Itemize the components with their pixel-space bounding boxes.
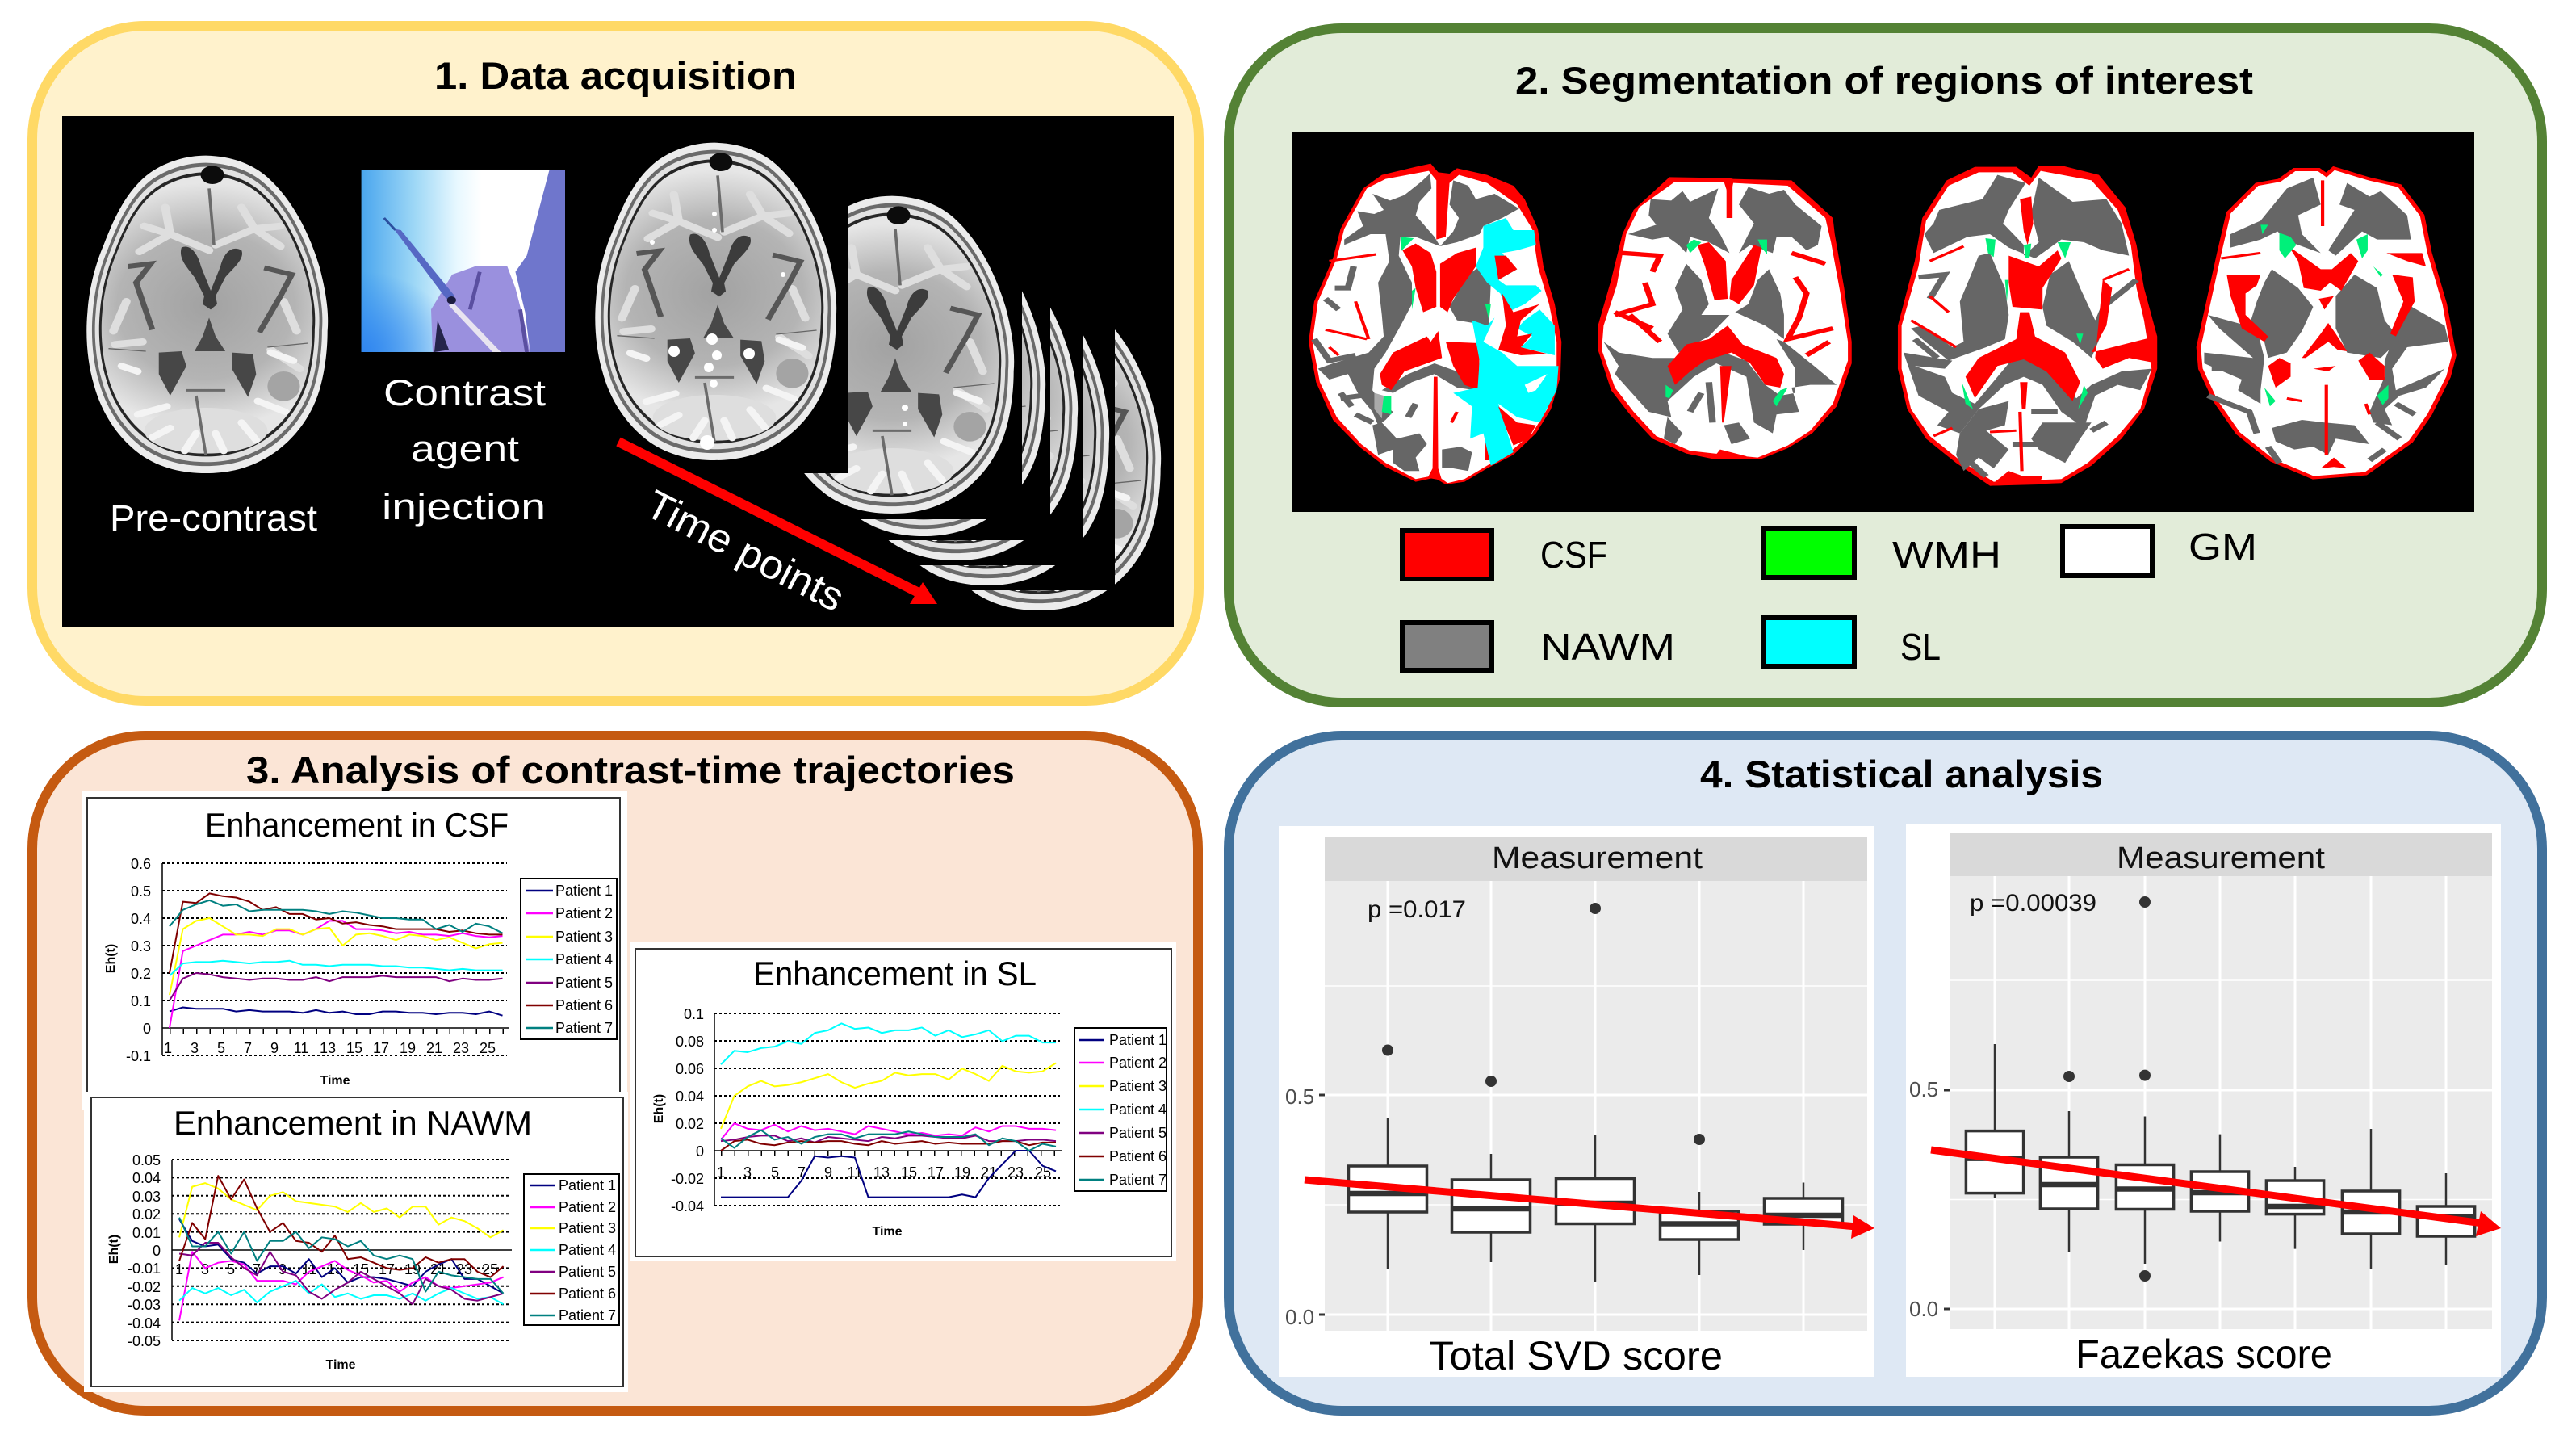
segmentation brain 2	[1598, 177, 1852, 459]
boxplot: total SVD score: Total SVD score	[1429, 1333, 1723, 1378]
chart: enhancement in NAWM: -0.05	[128, 1333, 161, 1349]
chart: enhancement in CSF: 23	[453, 1040, 469, 1056]
chart: enhancement in NAWM: 11	[302, 1261, 316, 1277]
chart: enhancement in CSF: -0.1	[126, 1048, 151, 1064]
boxplot: Fazekas score: Measurement	[2117, 841, 2325, 875]
chart: enhancement in CSF: 21	[426, 1040, 442, 1056]
chart: enhancement in SL: Patient 5	[1109, 1125, 1167, 1141]
chart: enhancement in SL: 9	[824, 1164, 832, 1181]
boxplot: Fazekas score: 0.5	[1909, 1077, 1938, 1101]
chart: enhancement in CSF: 0.2	[131, 966, 151, 982]
chart: enhancement in CSF: Enhancement in CSF	[205, 806, 509, 844]
chart: enhancement in SL: 5	[771, 1164, 779, 1181]
boxplot: total SVD score: 0.0	[1285, 1305, 1314, 1329]
chart: enhancement in CSF: Patient 4	[555, 951, 613, 967]
chart: enhancement in SL: Time	[872, 1225, 903, 1239]
segmentation brain 3	[1898, 166, 2157, 486]
chart: enhancement in CSF: Time	[320, 1074, 350, 1088]
chart: enhancement in NAWM: 5	[227, 1261, 235, 1277]
panel: segmentation of regions of interest	[1229, 28, 2542, 703]
chart: enhancement in NAWM: 15	[353, 1261, 369, 1277]
chart: enhancement in CSF: 25	[480, 1040, 496, 1056]
chart: enhancement in NAWM: -0.03	[128, 1297, 161, 1313]
chart: enhancement in CSF: 19	[400, 1040, 416, 1056]
chart: enhancement in NAWM: 25	[482, 1261, 498, 1277]
chart: enhancement in SL: 11	[848, 1164, 862, 1181]
chart: enhancement in SL: -0.02	[671, 1171, 704, 1187]
chart: enhancement in CSF: 9	[270, 1040, 279, 1056]
chart: enhancement in CSF: Patient 5	[555, 975, 613, 991]
chart: enhancement in CSF	[82, 791, 627, 1121]
image stack: time point MRI frames	[565, 121, 1161, 610]
chart: enhancement in CSF: Patient 1	[555, 883, 613, 899]
chart: enhancement in CSF: Patient 3	[555, 929, 613, 945]
chart: enhancement in CSF: 0.5	[131, 883, 151, 900]
boxplot: total SVD score: Measurement	[1492, 841, 1703, 875]
chart: enhancement in NAWM: 13	[327, 1261, 343, 1277]
panel: analysis of contrast-time trajectories	[32, 736, 1198, 1411]
legend: NAWM: NAWM	[1540, 626, 1675, 668]
chart: enhancement in SL: 21	[981, 1164, 997, 1181]
chart: enhancement in CSF: Patient 6	[555, 997, 613, 1013]
chart: enhancement in SL: Enhancement in SL	[753, 954, 1037, 992]
chart: enhancement in NAWM: Patient 5	[559, 1264, 616, 1280]
segmentation brain 1	[1309, 164, 1561, 484]
chart: enhancement in SL: 0.06	[676, 1061, 704, 1077]
chart: enhancement in NAWM: 0.03	[132, 1189, 161, 1205]
chart: enhancement in CSF: 0.6	[131, 856, 151, 872]
chart: enhancement in NAWM: 19	[404, 1261, 421, 1277]
chart: enhancement in NAWM: Patient 2	[559, 1199, 616, 1215]
chart: enhancement in CSF: 0.1	[131, 993, 151, 1009]
chart: enhancement in NAWM: Patient 3	[559, 1220, 616, 1236]
black segmentation backdrop	[1292, 132, 2474, 512]
black image backdrop	[62, 116, 1174, 627]
chart: enhancement in SL: 1	[717, 1164, 725, 1181]
title: data acquisition: 1. Data acquisition	[434, 54, 797, 97]
chart: enhancement in CSF: 7	[244, 1040, 252, 1056]
chart: enhancement in NAWM: -0.01	[128, 1261, 161, 1277]
chart: enhancement in SL: Patient 3	[1109, 1078, 1167, 1094]
chart: enhancement in NAWM: 1	[175, 1261, 183, 1277]
chart: enhancement in SL: 0.1	[684, 1006, 704, 1022]
chart: enhancement in SL: Patient 6	[1109, 1148, 1167, 1164]
chart: enhancement in NAWM: 0.01	[132, 1225, 161, 1241]
chart: enhancement in SL: -0.04	[671, 1198, 704, 1214]
label: time points: Time points	[639, 481, 852, 620]
arrow: time	[618, 442, 937, 604]
label: contrast agent injection	[382, 372, 547, 527]
boxplot: Fazekas score	[1906, 824, 2501, 1377]
chart: enhancement in SL	[630, 942, 1176, 1261]
legend: WMH	[1764, 528, 2001, 577]
title: statistical analysis: 4. Statistical analysis	[1700, 753, 2103, 795]
chart: enhancement in CSF: Patient 7	[555, 1020, 613, 1036]
chart: enhancement in CSF: 1	[164, 1040, 172, 1056]
chart: enhancement in CSF: Patient 2	[555, 905, 613, 921]
legend: NAWM	[1402, 623, 1675, 670]
chart: enhancement in NAWM: 0.05	[132, 1152, 161, 1168]
boxplot: Fazekas score: p =0.00039	[1970, 890, 2096, 917]
chart: enhancement in CSF: 0	[143, 1021, 151, 1037]
boxplot: Fazekas score: 0.0	[1909, 1297, 1938, 1321]
chart: enhancement in SL: 3	[743, 1164, 752, 1181]
arrow: downward trend	[1305, 1180, 1874, 1239]
chart: enhancement in SL: 0.02	[676, 1116, 704, 1132]
chart: enhancement in SL: Eh(t)	[652, 1094, 666, 1123]
label: contrast agent injection: Contrast	[383, 372, 547, 413]
chart: enhancement in NAWM: 9	[279, 1261, 287, 1277]
legend: CSF: CSF	[1540, 534, 1607, 576]
chart: enhancement in SL: 7	[798, 1164, 806, 1181]
boxplot: total SVD score	[1279, 826, 1874, 1378]
legend: WMH: WMH	[1892, 534, 2001, 576]
title: analysis: 3. Analysis of contrast-time trajectories	[246, 749, 1015, 791]
chart: enhancement in SL: 13	[873, 1164, 890, 1181]
chart: enhancement in CSF: 5	[217, 1040, 225, 1056]
label: pre-contrast: Pre-contrast	[110, 497, 318, 539]
chart: enhancement in SL: 15	[901, 1164, 917, 1181]
chart: enhancement in CSF: 13	[320, 1040, 336, 1056]
chart: enhancement in NAWM: 3	[201, 1261, 209, 1277]
chart: enhancement in SL: Patient 2	[1109, 1055, 1167, 1071]
chart: enhancement in NAWM: 0.04	[132, 1170, 161, 1186]
panel: statistical analysis	[1229, 736, 2542, 1411]
chart: enhancement in SL: Patient 7	[1109, 1172, 1167, 1188]
chart: enhancement in NAWM: 23	[456, 1261, 472, 1277]
chart: enhancement in SL: Patient 1	[1109, 1032, 1167, 1048]
boxplot: total SVD score: 0.5	[1285, 1084, 1314, 1109]
chart: enhancement in SL: 19	[954, 1164, 970, 1181]
chart: enhancement in NAWM: -0.04	[128, 1315, 161, 1332]
chart: enhancement in CSF: 0.3	[131, 938, 151, 954]
image: contrast injection photo	[362, 170, 568, 352]
chart: enhancement in NAWM: Eh(t)	[107, 1235, 121, 1264]
chart: enhancement in NAWM: 21	[430, 1261, 446, 1277]
chart: enhancement in SL: 25	[1035, 1164, 1051, 1181]
panel: data acquisition	[32, 26, 1199, 701]
chart: enhancement in NAWM: Enhancement in NAWM	[174, 1104, 532, 1142]
legend: GM	[2063, 526, 2257, 576]
title: segmentation: 2. Segmentation of regions of interest	[1515, 59, 2253, 102]
chart: enhancement in CSF: 0.4	[131, 911, 151, 927]
chart: enhancement in NAWM: Patient 1	[559, 1177, 616, 1193]
chart: enhancement in NAWM: -0.02	[128, 1279, 161, 1295]
chart: enhancement in NAWM: 0.02	[132, 1206, 161, 1223]
chart: enhancement in CSF: Eh(t)	[104, 944, 118, 973]
legend: GM: GM	[2189, 526, 2257, 568]
chart: enhancement in CSF: 17	[373, 1040, 389, 1056]
chart: enhancement in NAWM: Patient 6	[559, 1286, 616, 1302]
label: contrast agent injection: injection	[382, 486, 546, 527]
chart: enhancement in SL: 0.04	[676, 1089, 704, 1105]
chart: enhancement in CSF: 11	[294, 1040, 308, 1056]
legend: SL: SL	[1900, 626, 1941, 668]
label: contrast agent injection: agent	[411, 428, 520, 469]
chart: enhancement in NAWM: Time	[325, 1358, 356, 1372]
arrow: downward trend	[1931, 1150, 2501, 1236]
chart: enhancement in NAWM: 0	[153, 1243, 161, 1259]
chart: enhancement in NAWM: 7	[253, 1261, 261, 1277]
image: pre-contrast MRI	[86, 156, 328, 473]
chart: enhancement in SL: 0	[696, 1143, 704, 1160]
legend: SL	[1764, 618, 1941, 668]
chart: enhancement in SL: Patient 4	[1109, 1101, 1167, 1118]
chart: enhancement in NAWM: Patient 4	[559, 1242, 616, 1258]
chart: enhancement in CSF: 15	[346, 1040, 362, 1056]
chart: enhancement in CSF: 3	[191, 1040, 199, 1056]
chart: enhancement in NAWM: 17	[379, 1261, 395, 1277]
chart: enhancement in NAWM: Patient 7	[559, 1307, 616, 1323]
boxplot: total SVD score: p =0.017	[1368, 896, 1466, 923]
chart: enhancement in NAWM	[84, 1092, 628, 1392]
chart: enhancement in SL: 17	[928, 1164, 944, 1181]
chart: enhancement in SL: 23	[1007, 1164, 1024, 1181]
boxplot: Fazekas score: Fazekas score	[2075, 1332, 2332, 1377]
segmentation brain 4	[2198, 168, 2454, 478]
chart: enhancement in SL: 0.08	[676, 1034, 704, 1050]
legend: CSF	[1402, 531, 1607, 579]
